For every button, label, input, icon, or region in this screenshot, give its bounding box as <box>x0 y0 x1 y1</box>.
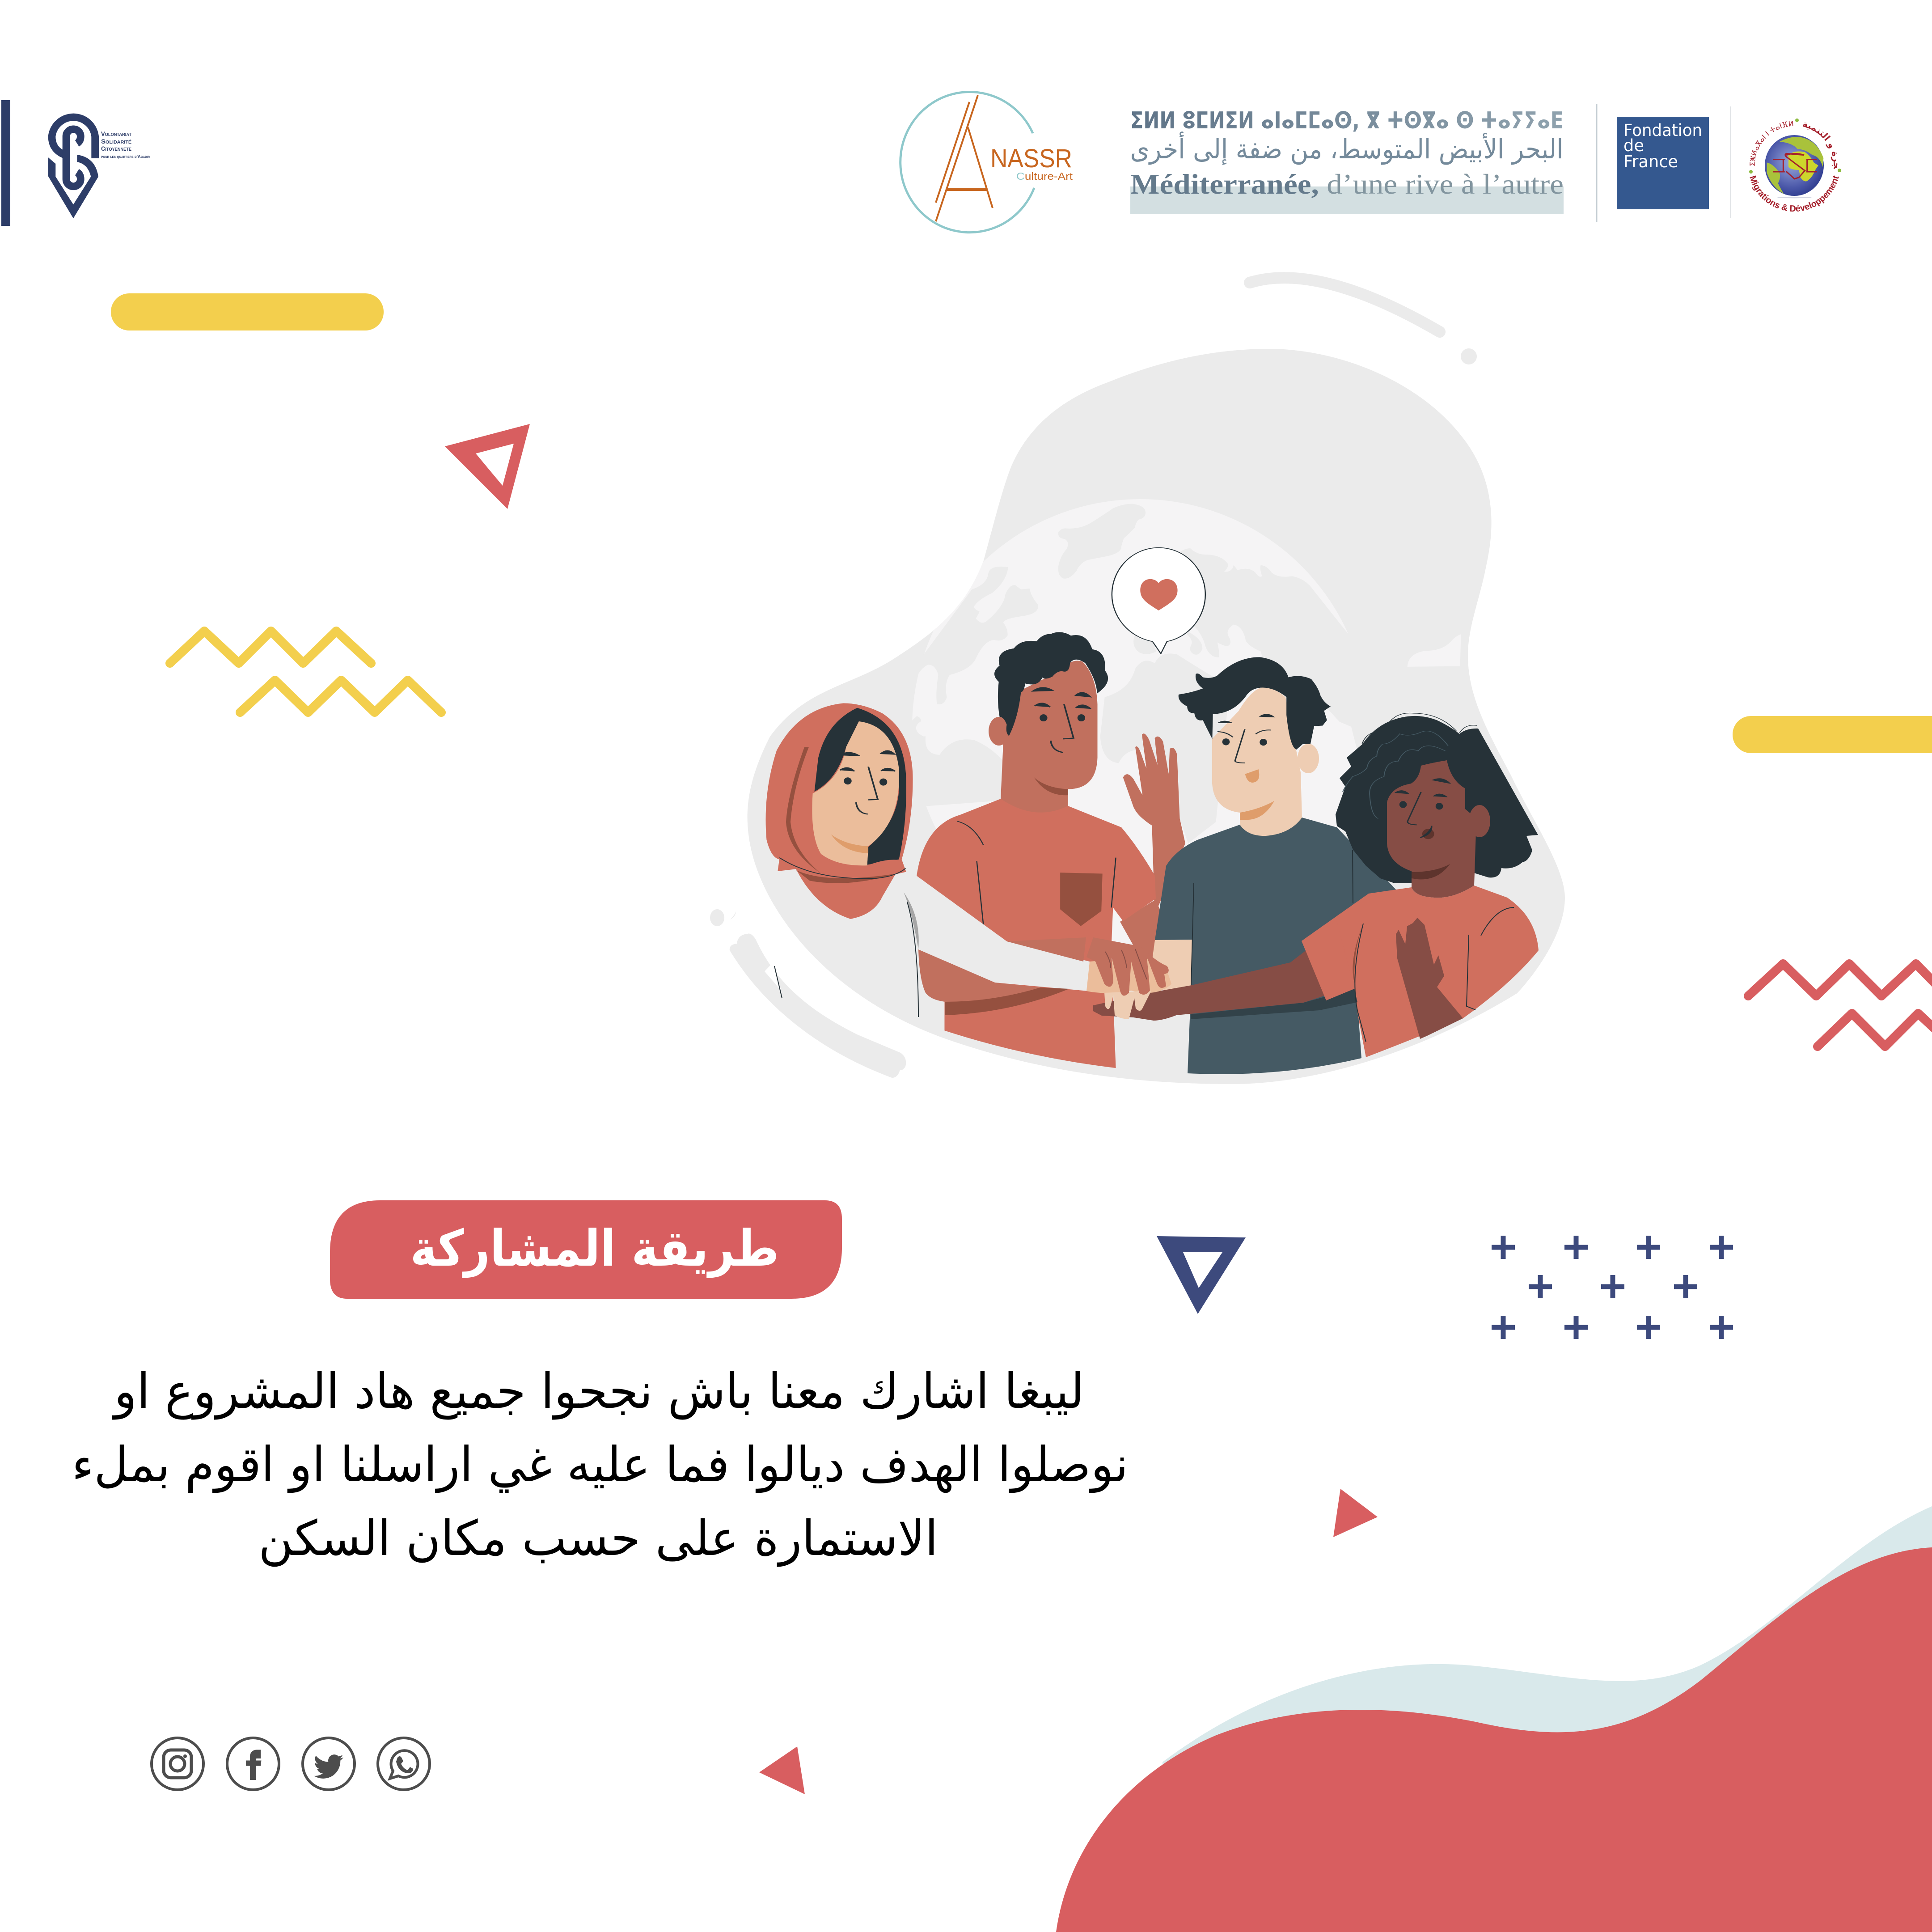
notch in arc <box>765 963 781 991</box>
man's forearm top <box>1007 937 1086 962</box>
logo: volontariat solidarité citoyenneté <box>48 117 150 218</box>
pill: yellow top left <box>111 293 384 330</box>
continent: west coast <box>778 567 1038 761</box>
person: man in slate shirt <box>1151 657 1396 1074</box>
face and neck <box>1212 687 1302 836</box>
shirt <box>1302 886 1539 1057</box>
facial features <box>840 751 895 814</box>
logo wordmark <box>101 130 150 159</box>
curly hair <box>1336 716 1538 883</box>
culture-art wordmark: Culture-Art <box>1016 170 1073 182</box>
person: woman with curly hair <box>1093 713 1539 1057</box>
forearm shadow <box>945 987 1069 1015</box>
forearm <box>1151 940 1192 995</box>
illustration: people with joined hands <box>710 278 1565 1084</box>
sleeve <box>917 876 1090 991</box>
face and neck <box>1387 760 1476 898</box>
scarf fold over chin <box>821 860 906 879</box>
left vertical bar <box>1 100 10 226</box>
bubble <box>1112 548 1205 654</box>
headscarf <box>766 703 913 919</box>
shirt crease shade <box>1353 924 1363 984</box>
ring dots <box>1749 119 1841 174</box>
torso shade <box>904 892 919 949</box>
heart <box>1140 579 1178 610</box>
shirt creases <box>1355 907 1514 1042</box>
body text: نوصلوا الهدف ديالوا فما عليه غي اراسلنا او اقوم بملء <box>72 1437 1129 1493</box>
crescent accent <box>730 911 736 919</box>
body text: ليبغا اشارك معنا باش نجحوا جميع هاد المشروع او <box>112 1364 1084 1420</box>
french line: Méditerranée, d’une rive à l’autre <box>1130 168 1564 200</box>
globe <box>1765 135 1824 196</box>
loose hair lines <box>1362 713 1477 744</box>
pill: yellow right <box>1733 716 1932 753</box>
divider <box>1596 104 1597 222</box>
facial features <box>1217 714 1275 783</box>
ring text bottom: Migrations & Développement <box>1747 174 1841 214</box>
shirt pocket <box>1060 873 1103 926</box>
icon: instagram <box>152 1738 203 1790</box>
light patch <box>1408 634 1461 667</box>
chin shadow <box>1034 777 1068 795</box>
body text <box>72 1364 1129 1567</box>
facial features <box>1395 779 1450 839</box>
hair <box>1179 657 1331 750</box>
raised hand on chest <box>1396 918 1463 1039</box>
triangle outline: navy <box>1157 1236 1246 1314</box>
chin shadow <box>1240 801 1274 820</box>
grey dot top right <box>1461 348 1477 364</box>
logo: Anassr culture-art <box>900 92 1073 233</box>
scarf folds <box>786 747 896 883</box>
blue square <box>1617 117 1709 209</box>
top hand <box>1086 937 1169 996</box>
joined hands <box>1007 937 1171 1019</box>
globe disc <box>912 499 1368 955</box>
pill background <box>330 1200 842 1299</box>
person: woman in hijab <box>766 703 1090 1017</box>
globe with continents <box>778 499 1461 955</box>
logo wordmark: Volontariat <box>101 130 131 137</box>
background blob <box>748 349 1565 1084</box>
chin shadow <box>831 835 868 853</box>
continent: south pieces <box>905 653 1230 843</box>
ear <box>1298 744 1319 773</box>
icon: whatsapp <box>378 1738 430 1790</box>
icon: facebook <box>227 1738 279 1790</box>
grey arc top right <box>1250 278 1440 332</box>
logo: Fondation de France <box>1617 117 1709 209</box>
grey dot bottom left <box>710 909 724 926</box>
wordmark: Fondation <box>1623 121 1702 140</box>
wordmark: France <box>1623 152 1678 171</box>
zigzags: red <box>1748 964 1932 1046</box>
bottom wave: pale blue <box>1163 1506 1932 1932</box>
shirt creases <box>1191 850 1353 986</box>
continents, upper <box>1058 504 1368 749</box>
pale strip <box>1130 186 1564 214</box>
logo wordmark: pour les quartiers d'Agadir <box>101 154 150 159</box>
arabic line: البحر الأبيض المتوسط، من ضفة إلى أخرى <box>1130 131 1563 165</box>
logo: Migrations & Développement <box>0 0 1842 214</box>
scarf line <box>779 858 905 878</box>
small triangle: red right <box>1333 1489 1378 1537</box>
hair strand curves <box>1343 731 1448 818</box>
shirt creases <box>957 821 1116 925</box>
icon: twitter <box>303 1738 355 1790</box>
chin shadow <box>1412 864 1450 879</box>
triangle outline: red <box>445 424 530 509</box>
globe artwork <box>1767 137 1823 198</box>
person: man in coral shirt <box>917 632 1185 1068</box>
logo mark: pin <box>48 117 98 218</box>
tifinagh line: ⵉⵍⵍ ⵓⵎⵍⵉⵍ ⴰⵏⴰⵎⵎⴰⵙ, ⴳ ⵜⵙⴳⴰ ⵙ ⵜⴰⵢⵢⴰⴹ <box>1130 107 1564 134</box>
forearm under sleeve <box>918 949 1040 1002</box>
face <box>812 721 899 865</box>
wordmark: de <box>1623 136 1644 155</box>
bottom wave: coral <box>1056 1547 1932 1932</box>
reaching arm <box>1093 950 1326 1021</box>
arm shadow on slate shirt <box>1191 989 1357 1019</box>
facial features <box>1033 688 1091 752</box>
logo wordmark: Solidarité <box>101 138 131 145</box>
neck and face <box>1001 661 1097 813</box>
divider <box>1730 106 1731 218</box>
raised hand <box>1123 733 1185 915</box>
sleeve over arm <box>1302 921 1354 1000</box>
ear <box>989 717 1009 746</box>
torso line <box>907 902 918 1017</box>
logo wordmark: Citoyenneté <box>101 145 131 152</box>
grey arcs bottom left <box>730 934 906 1078</box>
body text: الاستمارة على حسب مكان السكن <box>258 1511 938 1567</box>
social icons <box>152 1738 430 1790</box>
lower hand, hijab woman <box>1086 957 1171 993</box>
curly hair <box>994 632 1108 736</box>
heading: pill <box>330 1200 842 1299</box>
slate shirt <box>1155 818 1396 1074</box>
finger lines <box>1105 949 1147 979</box>
teal ring <box>900 92 1034 233</box>
small triangle: red lower <box>759 1746 805 1794</box>
small sketch line <box>774 966 782 998</box>
sleeve skin <box>1120 899 1171 984</box>
logo: Méditerranée d'une rive à l'autre <box>1130 107 1564 214</box>
zigzags: yellow <box>170 631 441 712</box>
fingers pointing down <box>1104 991 1151 1019</box>
heading text: طريقة المشاركة <box>410 1220 779 1278</box>
wordmark <box>1623 121 1702 171</box>
NASSR wordmark: NASSR <box>990 144 1072 173</box>
plus pattern <box>1492 1236 1733 1339</box>
orange easel A <box>936 95 993 221</box>
hair <box>814 708 906 865</box>
ear <box>1469 805 1490 837</box>
speech bubble with heart <box>1112 548 1205 654</box>
torso shirt <box>917 799 1156 1068</box>
